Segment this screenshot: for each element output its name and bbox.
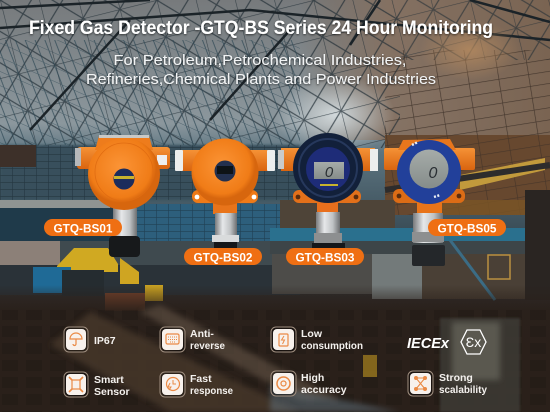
device: GTQ-BS03: 0 [325,164,334,181]
device: GTQ-BS03 [278,133,378,250]
subtitle: Refineries,Chemical Plants and Power Industries [86,71,436,88]
label: GTQ-BS02: GTQ-BS02 [194,250,253,264]
feature: Smart Sensor [64,372,130,398]
certification: Ex hexagon: Ɛx [466,334,481,350]
subtitle: For Petroleum,Petrochemical Industries, [114,52,406,69]
feature: Smart Sensor: Smart [94,374,124,386]
feature: Smart Sensor: Sensor [94,386,130,398]
title: Fixed Gas Detector -GTQ-BS Series 24 Hour Monitoring [29,18,493,39]
feature: Low consumption [271,327,363,352]
feature: High accuracy: High [301,372,324,384]
feature: High accuracy [271,371,347,396]
subtitle [86,52,436,88]
certification: IECEx: IECEx [407,335,450,352]
device: GTQ-BS05: 0 [429,165,438,182]
feature: IP67: IP67 [94,335,116,347]
feature: IP67 [64,327,116,352]
feature: Fast response [160,372,233,397]
label: GTQ-BS03 [286,248,364,265]
feature: Fast response: response [190,385,233,397]
label: GTQ-BS05 [428,219,506,236]
label: GTQ-BS01 [44,219,122,236]
label: GTQ-BS05: GTQ-BS05 [438,222,497,236]
label: GTQ-BS02 [184,248,262,265]
device: GTQ-BS01 [75,135,170,257]
feature: Low consumption: Low [301,328,323,340]
feature: High accuracy: accuracy [301,384,347,396]
feature: Low consumption: consumption [301,340,363,352]
feature: Strong scalability: scalability [439,384,487,396]
label: GTQ-BS03: GTQ-BS03 [296,250,355,264]
feature: Anti-reverse: Anti- [190,328,214,340]
feature: Anti-reverse: reverse [190,340,225,352]
device: GTQ-BS05 [384,139,475,266]
feature: Fast response: Fast [190,373,212,385]
certification: Ex hexagon [461,330,486,354]
feature: Strong scalability [408,371,487,396]
label: GTQ-BS01: GTQ-BS01 [54,222,113,236]
device: GTQ-BS02 [175,138,275,250]
feature: Strong scalability: Strong [439,372,473,384]
feature: Anti-reverse [160,327,225,352]
